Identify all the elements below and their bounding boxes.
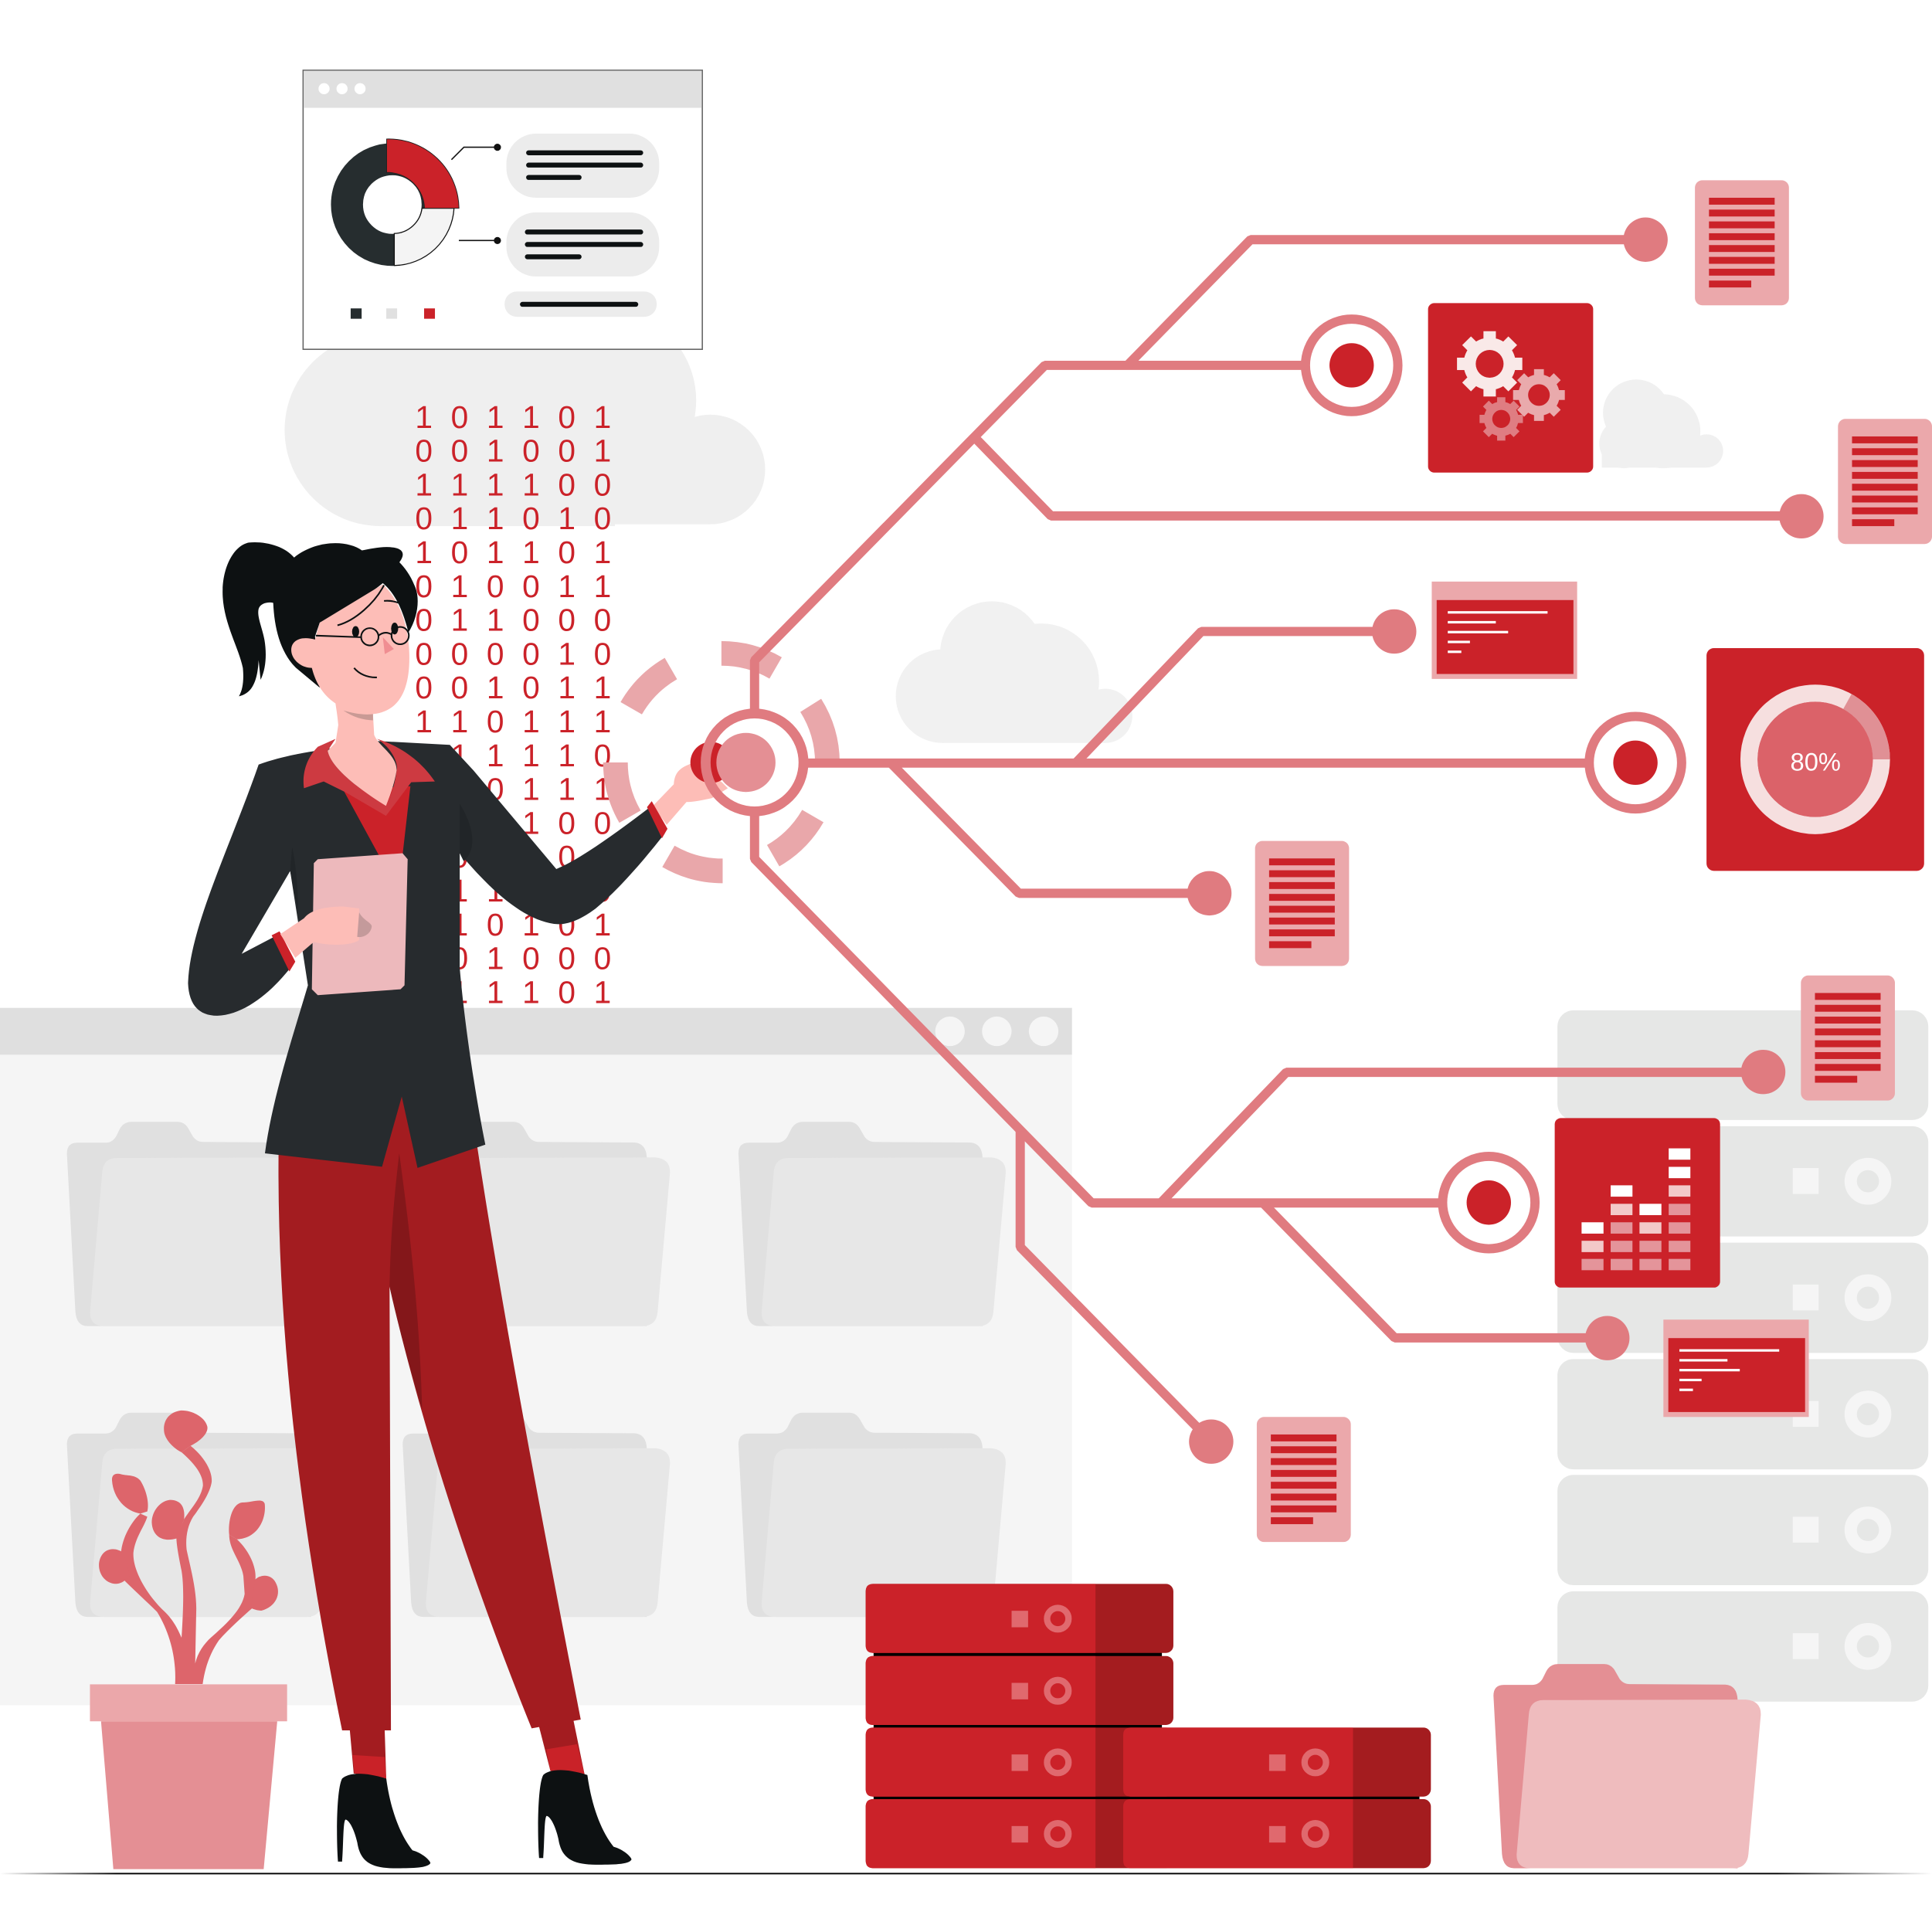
- middle cloud: [896, 601, 1132, 743]
- text pills: [504, 134, 659, 317]
- server racks grey: [1557, 1010, 1928, 1702]
- target nodes: [1306, 319, 1682, 1249]
- big cloud: [284, 308, 766, 526]
- percentage label: 80%: [1791, 748, 1841, 776]
- binary digits: 101001: [415, 839, 611, 874]
- small cloud top right: [1599, 379, 1723, 468]
- hub: [691, 714, 803, 811]
- binary digits: 111110: [415, 738, 611, 773]
- endpoint dots: [1187, 218, 1824, 1464]
- binary digits: 001011: [415, 670, 611, 705]
- shirt: [344, 786, 410, 855]
- binary digits: 101101: [415, 535, 611, 570]
- binary digits: 000010: [415, 636, 611, 671]
- nose: [383, 637, 394, 654]
- small gear: [1479, 397, 1523, 440]
- pink folder: [1493, 1664, 1761, 1868]
- grey folders: [67, 1122, 1006, 1617]
- plant pot: [90, 1684, 287, 1869]
- cuffs: [272, 801, 667, 972]
- right hand: [653, 762, 728, 825]
- binary digits: 011010: [415, 501, 611, 536]
- hub interior: [705, 713, 804, 812]
- glasses and facial lines: [316, 585, 409, 677]
- binary digits: 001001: [415, 433, 611, 469]
- binary digits: 010011: [415, 569, 611, 604]
- progress card: [1706, 648, 1924, 871]
- binary digits: 011010: [415, 873, 611, 908]
- dashed arcs around hub: [616, 654, 827, 871]
- hair: [222, 542, 418, 696]
- binary digits: 111100: [415, 805, 611, 840]
- folder window panel: [0, 1008, 1072, 1706]
- plant: [99, 1411, 278, 1684]
- document icons: [1255, 180, 1932, 1542]
- face and neck: [291, 584, 409, 806]
- binary digits: 110111: [415, 704, 611, 739]
- binary digits: 110111: [415, 772, 611, 807]
- large gear: [1457, 331, 1523, 396]
- binary digits: 011000: [415, 603, 611, 638]
- binary digits: 001000: [415, 941, 611, 976]
- callout leaders: [451, 144, 501, 243]
- left hand: [280, 906, 359, 958]
- donut chart: [347, 139, 459, 266]
- red server stack: [866, 1584, 1431, 1868]
- tablet: [312, 854, 408, 995]
- binary digits: 101101: [415, 399, 611, 435]
- eyes: [352, 623, 398, 637]
- bar chart card: [1555, 1118, 1720, 1288]
- small report cards: [1431, 582, 1808, 1417]
- dashboard window: [303, 70, 702, 349]
- upper body: [188, 542, 728, 1168]
- collar: [304, 739, 435, 816]
- binary digits: [415, 399, 611, 1010]
- medium gear: [1513, 369, 1565, 421]
- gears card: [1428, 303, 1593, 473]
- network lines: [755, 239, 1801, 1441]
- binary digits: 110101: [415, 907, 611, 942]
- jacket: [188, 741, 665, 1168]
- trousers and shoes: [278, 1092, 632, 1868]
- woman figure: [188, 542, 728, 1868]
- binary digits: 111101: [415, 974, 611, 1010]
- legend squares: [351, 308, 435, 319]
- ground line: [0, 1873, 1932, 1874]
- binary digits: 111100: [415, 467, 611, 502]
